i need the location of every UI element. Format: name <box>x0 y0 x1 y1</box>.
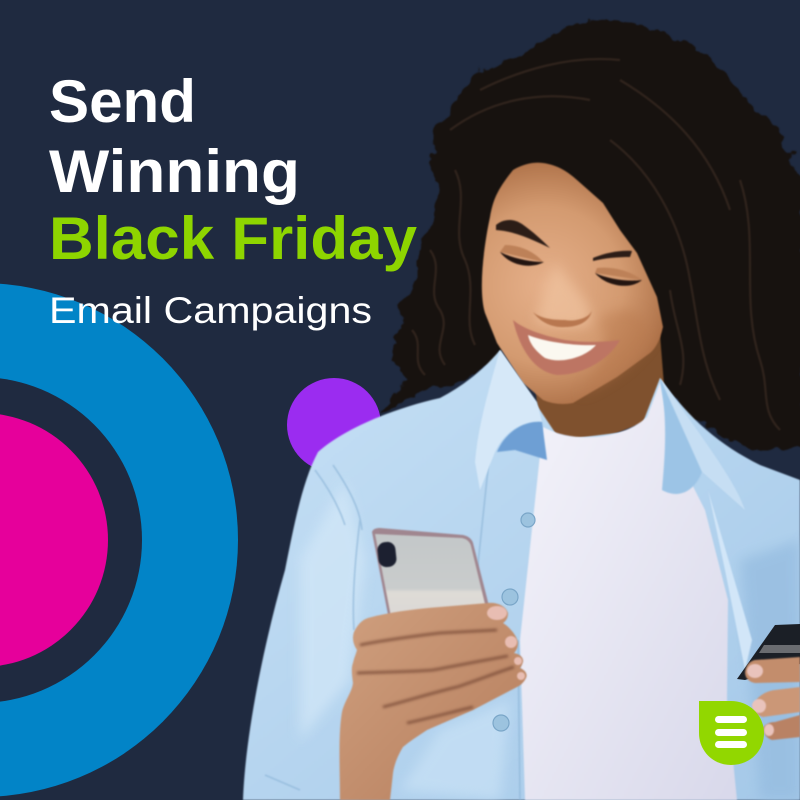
sleeve fold lines <box>265 450 520 800</box>
right hand fingers <box>745 657 800 740</box>
hair <box>381 20 800 450</box>
nose shadow <box>533 310 592 327</box>
hand holding phone <box>340 603 527 800</box>
eyes <box>500 245 642 286</box>
title: Winning <box>49 138 300 205</box>
left collar <box>475 350 547 490</box>
cheek and nose shading <box>535 262 650 395</box>
fingernails <box>487 606 525 680</box>
shirt body <box>243 350 800 800</box>
lips <box>513 320 620 375</box>
title <box>49 68 418 272</box>
hair strands <box>412 59 780 430</box>
phone <box>372 528 493 630</box>
right collar <box>660 378 745 510</box>
shirt shading <box>300 480 800 800</box>
t-shirt <box>520 383 737 800</box>
eyebrows <box>496 220 632 261</box>
placket <box>708 490 752 670</box>
purple circle <box>287 378 381 472</box>
card stripe <box>759 645 800 653</box>
title: Black Friday <box>49 205 418 272</box>
card <box>737 624 800 680</box>
subtitle: Email Campaigns <box>49 290 372 331</box>
buttons <box>493 513 535 731</box>
face <box>482 163 663 404</box>
woman photo illustration <box>243 20 800 800</box>
concentric circles graphic <box>0 283 238 797</box>
neck <box>535 335 664 442</box>
teeth <box>528 335 596 360</box>
finger separations <box>357 630 514 723</box>
logo <box>699 701 764 765</box>
title: Send <box>49 68 196 135</box>
